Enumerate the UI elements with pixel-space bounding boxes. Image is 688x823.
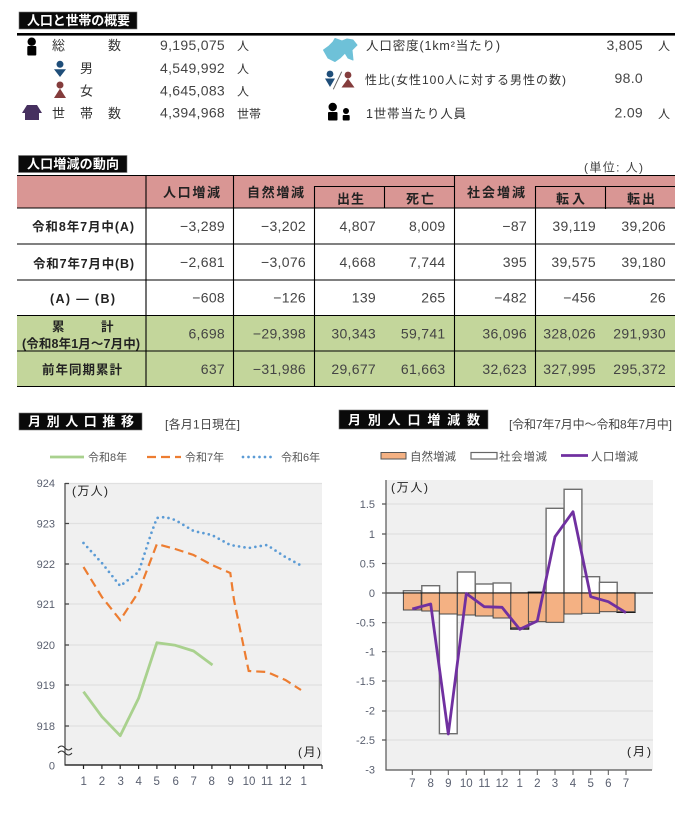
axis break mark — [58, 746, 72, 755]
row: cumulative: 6,698 — [188, 326, 225, 342]
icon: total person — [27, 38, 36, 56]
line: 令和7年 — [84, 544, 301, 690]
row: cumulative: 計 — [101, 319, 114, 334]
heading: 人口増減の動向: 人口増減の動向 — [27, 156, 119, 172]
row: population density: 3,805 — [606, 37, 643, 53]
row: (A)-(B): −482 — [494, 290, 527, 306]
icon: male — [54, 61, 66, 77]
row: (A)-(B): −126 — [273, 290, 306, 306]
table header: 死亡 — [406, 192, 434, 206]
row: male population: 4,549,992 — [160, 60, 225, 76]
row: cumulative: 328,026 — [543, 326, 596, 342]
y axis labels: 923 — [37, 518, 55, 530]
month unit label: (月) — [298, 745, 321, 759]
row: (A)-(B): −456 — [563, 290, 596, 306]
x axis labels: 2 — [99, 776, 105, 788]
month unit label: (月) — [627, 744, 651, 758]
x axis labels: 8 — [427, 778, 434, 790]
row: households: 世帯 — [237, 107, 261, 121]
table header: 自然増減 — [247, 185, 304, 200]
x axis labels: 8 — [208, 776, 215, 788]
row: persons per household: 人 — [658, 107, 670, 121]
row: male population: 男 — [80, 61, 93, 76]
table header: 転入 — [556, 192, 585, 206]
y axis labels — [356, 499, 375, 776]
row: 令和7年7月中(B): −2,681 — [180, 254, 225, 270]
x axis labels: 3 — [117, 776, 124, 788]
row: households: 数 — [108, 106, 121, 121]
y axis labels: 1.5 — [360, 499, 375, 511]
y axis labels: 920 — [37, 640, 55, 652]
row: previous year cumulative: 61,663 — [401, 361, 446, 377]
legend: monthly population: 令和6年 — [281, 450, 320, 464]
row: previous year cumulative: 29,677 — [331, 361, 376, 377]
unit note: (単位: 人) — [584, 160, 643, 174]
panel: population overview right — [324, 37, 670, 121]
chart: monthly change bar and line chart — [356, 480, 653, 790]
row: cumulative: −29,398 — [253, 326, 306, 342]
x axis labels: 1 — [300, 776, 307, 788]
row: female population: 4,645,083 — [160, 82, 225, 98]
row: households: 帯 — [80, 106, 93, 121]
row: 令和8年7月中(A): 39,206 — [621, 218, 666, 234]
row: (A)-(B): −608 — [192, 290, 225, 306]
row: persons per household: 1世帯当たり人員 — [366, 107, 466, 121]
row: 令和7年7月中(B): 39,575 — [551, 254, 596, 270]
row: female population: 人 — [237, 84, 249, 98]
row: 令和8年7月中(A): 39,119 — [552, 218, 596, 234]
row: cumulative — [22, 319, 666, 351]
row: previous year cumulative: 295,372 — [613, 361, 666, 377]
x axis labels: 9 — [227, 776, 234, 788]
y axis labels: -0.5 — [356, 618, 375, 630]
row: previous year cumulative — [42, 361, 666, 377]
x axis labels: 6 — [605, 778, 612, 790]
row: sex ratio: 98.0 — [615, 70, 643, 86]
table header: 転出 — [627, 192, 655, 206]
x axis labels: 5 — [587, 778, 594, 790]
heading: 月別人口増減数: 月別人口増減数 — [348, 412, 480, 428]
legend: monthly change: 自然増減 — [410, 450, 456, 464]
heading: 月別人口推移: 月別人口推移 — [28, 414, 134, 429]
heading: 月別人口増減数 — [339, 410, 488, 429]
x axis labels: 3 — [552, 778, 558, 790]
legend: monthly change: 人口増減 — [591, 450, 638, 464]
legend: monthly change — [381, 450, 638, 464]
row: population density: 人口密度(1km²当たり) — [366, 38, 500, 53]
row: previous year cumulative: 637 — [201, 361, 225, 377]
table header: 人口増減 — [163, 185, 220, 200]
y axis labels: -2 — [365, 706, 375, 718]
row: 令和7年7月中(B): 7,744 — [409, 254, 446, 270]
row: households — [52, 104, 261, 121]
icon: persons per household — [328, 103, 350, 120]
x axis labels: 5 — [153, 776, 160, 788]
row: 令和7年7月中(B): 39,180 — [621, 254, 666, 270]
row: cumulative: 291,930 — [613, 326, 666, 342]
row: 令和7年7月中(B): 4,668 — [339, 254, 376, 270]
icon: Kanagawa map — [324, 38, 357, 62]
x axis labels: 4 — [135, 776, 142, 788]
table header: 出生 — [337, 192, 364, 206]
row: (A)-(B): 26 — [650, 290, 666, 306]
x axis labels: 1 — [80, 776, 87, 788]
x axis labels: 7 — [409, 778, 416, 790]
row: (A)-(B): (A) ― (B) — [50, 292, 115, 306]
row: 令和8年7月中(A): 4,807 — [339, 218, 376, 234]
line: 令和6年 — [84, 517, 302, 586]
row: 令和8年7月中(A): −3,289 — [180, 218, 225, 234]
legend: monthly population: 令和7年 — [185, 450, 224, 464]
x axis labels: 1 — [516, 778, 523, 790]
row: 令和7年7月中(B): −3,076 — [261, 254, 306, 270]
row: sex ratio: 性比(女性100人に対する男性の数) — [365, 72, 566, 87]
icon: female — [54, 82, 66, 98]
row: cumulative: 36,096 — [482, 326, 527, 342]
x axis labels: 2 — [534, 778, 541, 790]
y axis labels — [37, 478, 55, 772]
x axis labels: 4 — [570, 778, 577, 790]
row: population density — [366, 37, 670, 53]
y axis labels: 0 — [49, 760, 55, 772]
row: cumulative: 30,343 — [331, 326, 376, 342]
row: previous year cumulative: 32,623 — [482, 361, 527, 377]
row: cumulative: (令和8年1月～7月中) — [22, 336, 140, 351]
y axis labels: 0 — [369, 588, 375, 600]
y axis labels: -3 — [365, 764, 375, 776]
table header: 社会増減 — [467, 185, 525, 200]
row: population density: 人 — [658, 39, 670, 53]
note: period: [令和7年7月中～令和8年7月中] — [509, 416, 672, 432]
x axis labels: 9 — [445, 778, 452, 790]
table header — [163, 185, 655, 206]
row: previous year cumulative: −31,986 — [253, 361, 306, 377]
row: total population — [52, 37, 249, 53]
row: households: 4,394,968 — [160, 104, 225, 120]
line: 令和8年 — [84, 643, 212, 736]
row: male population: 人 — [237, 62, 249, 76]
row: cumulative: 累 — [52, 320, 65, 334]
row: (A)-(B) — [50, 290, 666, 306]
x axis labels — [80, 776, 307, 788]
x axis labels: 12 — [279, 776, 292, 788]
unit label: (万人) — [391, 480, 428, 494]
y axis labels: -1 — [365, 646, 375, 658]
bars: 自然増減 — [403, 593, 635, 628]
legend: monthly change: 社会増減 — [499, 450, 548, 464]
row: previous year cumulative: 前年同期累計 — [42, 362, 122, 377]
y axis labels: 921 — [37, 599, 55, 611]
x axis labels: 10 — [460, 778, 473, 790]
x axis labels: 12 — [496, 778, 508, 790]
x axis labels: 7 — [623, 778, 629, 790]
unit labels: (万人) — [72, 484, 108, 498]
heading: 人口と世帯の概要: 人口と世帯の概要 — [27, 13, 130, 28]
panel: population overview left — [22, 37, 261, 121]
y axis labels: 0.5 — [360, 558, 375, 570]
row: total population: 総 — [52, 38, 65, 53]
y axis labels: 1 — [369, 529, 375, 541]
table: population change — [17, 175, 675, 386]
x axis labels: 6 — [172, 776, 179, 788]
row: 令和8年7月中(A): −87 — [502, 218, 527, 234]
row: total population: 9,195,075 — [160, 37, 225, 53]
row: 令和7年7月中(B) — [33, 254, 666, 271]
line: 人口増減 — [412, 512, 626, 734]
y axis labels: -1.5 — [356, 676, 375, 688]
row: sex ratio — [365, 70, 643, 87]
row: persons per household — [366, 104, 670, 121]
row: total population: 数 — [108, 38, 121, 53]
x axis labels — [409, 778, 629, 790]
row: 令和8年7月中(A): 8,009 — [409, 218, 446, 234]
y axis labels: 919 — [37, 680, 55, 692]
icon: sex ratio — [325, 71, 354, 89]
y axis labels: 924 — [37, 478, 55, 490]
row: (A)-(B): 265 — [421, 290, 446, 306]
x axis labels: 11 — [261, 776, 273, 788]
row: 令和8年7月中(A): 令和8年7月中(A) — [32, 219, 134, 234]
legend: monthly population: 令和8年 — [88, 450, 127, 464]
row: total population: 人 — [237, 39, 249, 53]
legend: monthly population — [50, 450, 320, 464]
row: male population — [80, 60, 249, 76]
y axis labels: 918 — [37, 721, 55, 733]
x axis labels: 7 — [190, 776, 197, 788]
row: (A)-(B): 139 — [352, 290, 376, 306]
row: female population: 女 — [80, 84, 93, 98]
row: 令和8年7月中(A) — [32, 218, 666, 234]
x axis labels: 11 — [478, 778, 490, 790]
y axis labels: 922 — [37, 559, 55, 571]
bars: 社会増減 — [403, 489, 635, 734]
chart: monthly population line chart — [37, 478, 322, 788]
y axis labels: -2.5 — [356, 735, 375, 747]
row: 令和7年7月中(B): 令和7年7月中(B) — [33, 256, 134, 271]
row: households: 世 — [52, 106, 65, 121]
x axis labels: 10 — [243, 776, 255, 788]
row: previous year cumulative: 327,995 — [543, 361, 596, 377]
row: 令和7年7月中(B): 395 — [503, 254, 527, 270]
row: persons per household: 2.09 — [615, 104, 643, 120]
row: 令和8年7月中(A): −3,202 — [261, 218, 306, 234]
row: cumulative: 59,741 — [401, 326, 446, 342]
note: 各月1日現在: [各月1日現在] — [165, 416, 240, 432]
icon: household — [22, 105, 42, 120]
row: female population — [80, 82, 249, 98]
